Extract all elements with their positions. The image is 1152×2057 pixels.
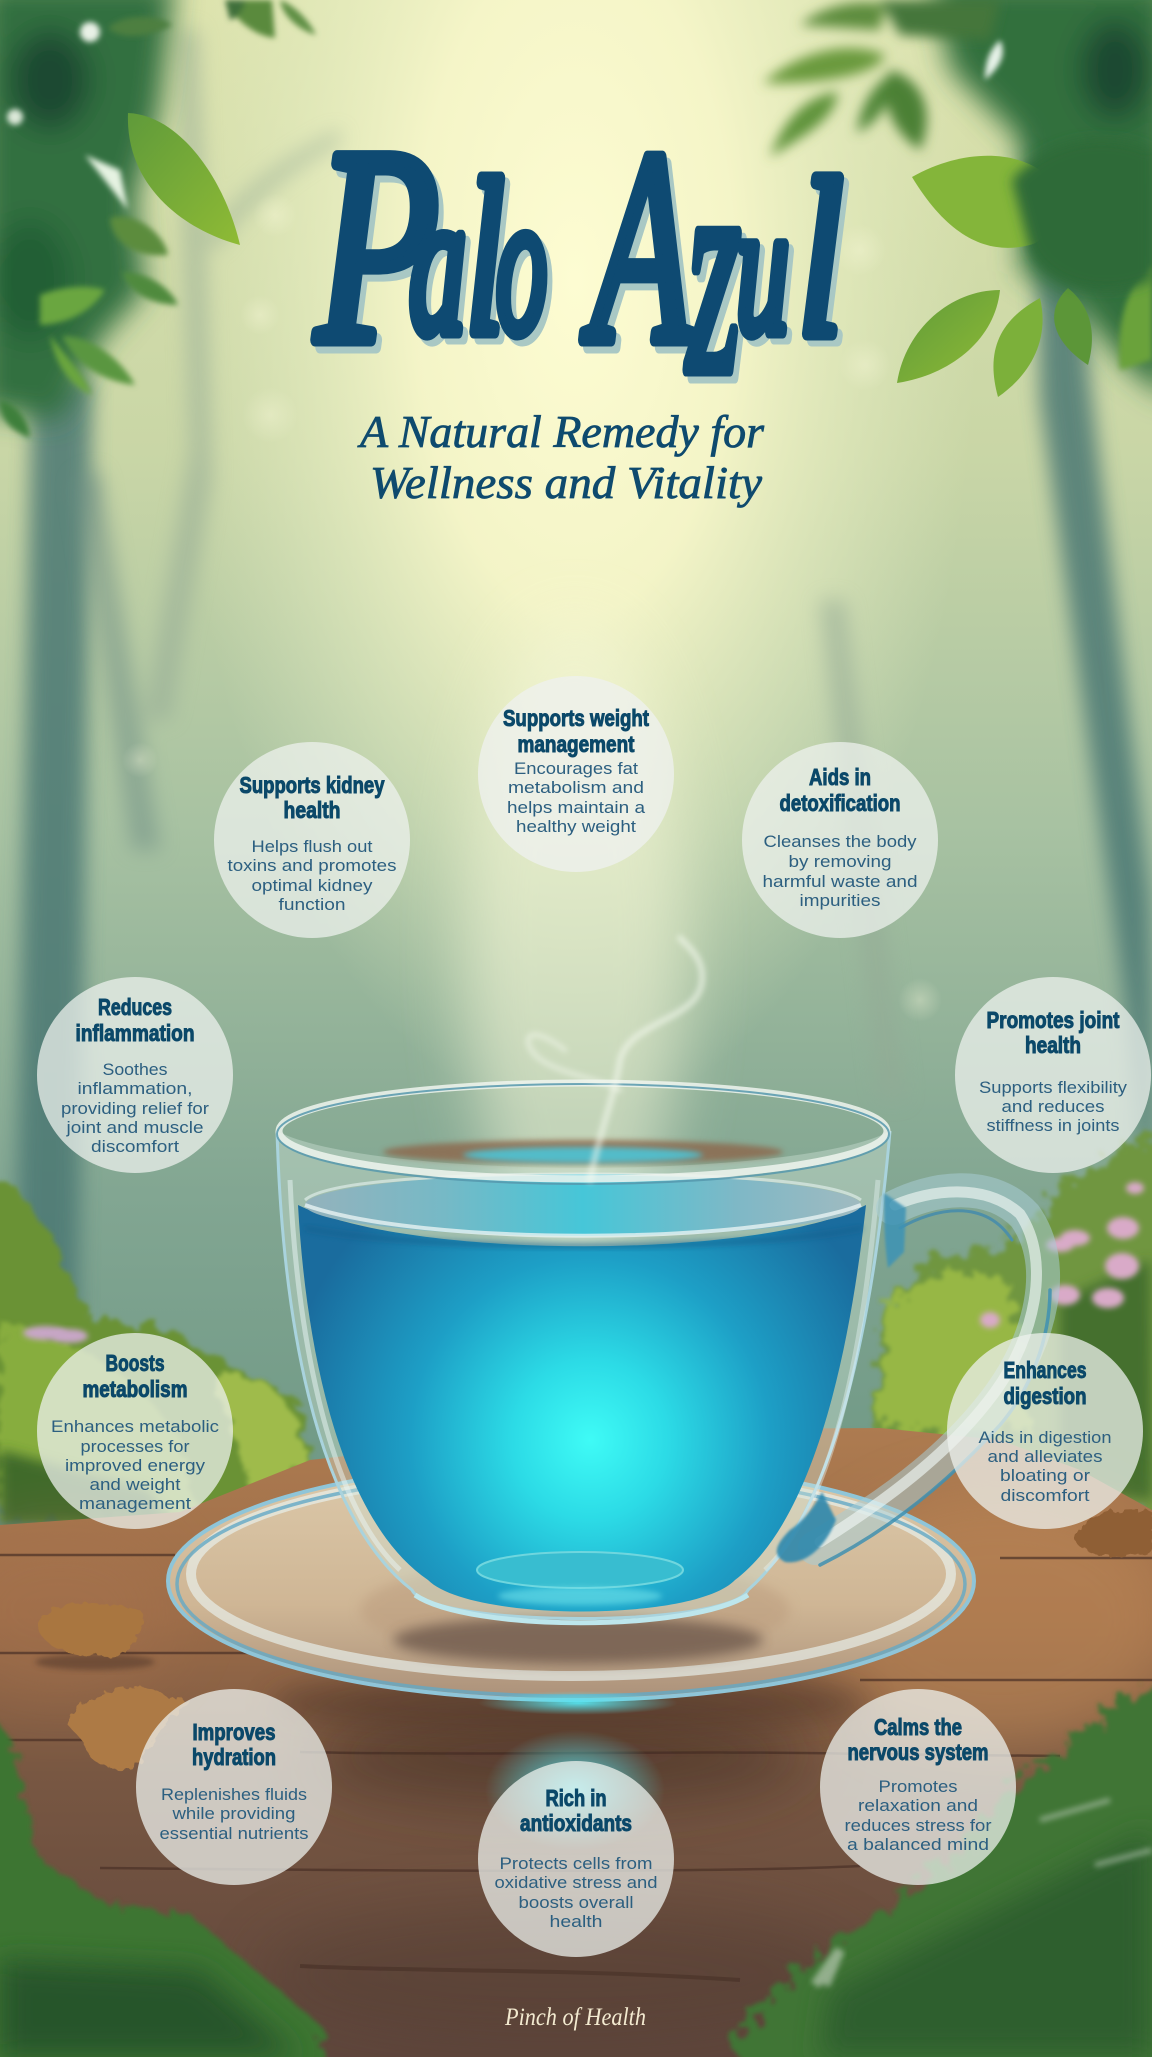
benefit: enhances digestion: digestion	[1004, 1383, 1086, 1409]
benefit: promotes joint health: and reduces	[1002, 1098, 1104, 1116]
cup base	[477, 1552, 683, 1588]
big left leaf	[128, 113, 240, 245]
benefit: aids in detoxification	[742, 742, 938, 938]
benefit: supports kidney health	[214, 742, 410, 938]
left foliage	[0, 0, 316, 438]
benefit: boosts metabolism: and weight	[90, 1476, 181, 1494]
benefit: calms the nervous system: nervous system	[848, 1739, 988, 1765]
benefit: supports kidney health: function	[278, 896, 346, 914]
title shadow: u	[741, 170, 794, 380]
benefit: supports weight management: metabolism and	[508, 779, 644, 797]
title main text: a	[409, 149, 466, 376]
benefit: aids in detoxification: impurities	[800, 892, 880, 910]
title main text: l	[798, 134, 843, 383]
benefit: rich in antioxidants: oxidative stress and	[494, 1874, 658, 1892]
benefit: enhances digestion: and alleviates	[988, 1448, 1102, 1466]
benefit: reduces inflammation: Soothes	[102, 1061, 168, 1079]
benefit: reduces inflammation: joint and muscle	[65, 1119, 203, 1137]
root chips on table	[35, 1509, 1152, 1769]
benefit: supports kidney health: Helps flush out	[252, 838, 373, 856]
benefit: boosts metabolism: Enhances metabolic	[51, 1418, 219, 1436]
benefit: supports weight management: Supports weight	[503, 705, 649, 731]
steam	[528, 938, 702, 1180]
benefit: reduces inflammation: inflammation,	[78, 1080, 192, 1098]
title main text: P	[314, 91, 439, 401]
benefit: boosts metabolism: metabolism	[82, 1376, 188, 1402]
wooden table	[0, 1428, 1152, 2057]
benefit: promotes joint health: health	[1025, 1032, 1081, 1058]
bokeh spots	[122, 193, 942, 1022]
benefit: calms the nervous system: Calms the	[874, 1714, 962, 1740]
title main text: A	[582, 94, 694, 401]
subtitle	[357, 406, 765, 508]
benefit: enhances digestion: Enhances	[1004, 1357, 1086, 1383]
benefit: supports kidney health: toxins and promotes	[228, 857, 396, 875]
benefit: rich in antioxidants: antioxidants	[520, 1810, 632, 1836]
right mid bush with flowers	[875, 1125, 1152, 1510]
footer brand: Pinch of Health	[504, 2004, 646, 2031]
benefit: reduces inflammation: discomfort	[91, 1138, 179, 1156]
benefit: supports weight management: helps maintain a	[507, 799, 646, 817]
title shadow: z	[690, 110, 746, 443]
benefit: improves hydration: hydration	[192, 1744, 276, 1770]
title main text: o	[496, 151, 547, 378]
benefit: reduces inflammation	[37, 977, 233, 1173]
back interior	[383, 1140, 783, 1164]
benefit: rich in antioxidants: Rich in	[546, 1785, 606, 1811]
benefit: boosts metabolism: improved energy	[65, 1457, 206, 1475]
benefit: supports kidney health: health	[284, 797, 340, 823]
benefit: calms the nervous system: reduces stress for	[844, 1817, 992, 1835]
title main text: u	[736, 164, 789, 374]
title shadow: P	[319, 98, 444, 408]
benefit: promotes joint health: Supports flexibility	[979, 1079, 1128, 1097]
cup rim	[279, 1083, 887, 1179]
subtitle: A Natural Remedy for	[357, 406, 765, 457]
title shadow: o	[501, 157, 552, 384]
benefit: aids in detoxification: harmful waste and	[762, 873, 918, 891]
benefit: boosts metabolism: Boosts	[106, 1350, 164, 1376]
left mid bush	[0, 1170, 312, 1525]
benefit: rich in antioxidants: boosts overall	[518, 1894, 634, 1912]
benefit: supports weight management: healthy weight	[516, 818, 636, 836]
benefit: supports kidney health: optimal kidney	[252, 877, 373, 895]
benefit: calms the nervous system: Promotes	[878, 1778, 958, 1796]
benefit: enhances digestion: discomfort	[1000, 1487, 1090, 1505]
benefit: calms the nervous system	[820, 1689, 1016, 1885]
right leaves	[912, 156, 1051, 248]
cup side highlight	[290, 1180, 400, 1570]
benefit: reduces inflammation: providing relief for	[61, 1100, 210, 1118]
cup handle	[815, 1190, 1050, 1565]
title main text	[314, 91, 843, 436]
handle joints	[884, 1193, 906, 1268]
title shadow: a	[414, 155, 471, 382]
subtitle: Wellness and Vitality	[370, 457, 763, 508]
benefit: aids in detoxification: Cleanses the body	[764, 833, 917, 851]
benefit: reduces inflammation: inflammation	[76, 1020, 194, 1046]
bottom right shrub	[735, 1680, 1152, 2057]
benefit: enhances digestion: Aids in digestion	[978, 1429, 1112, 1447]
title shadow: l	[803, 140, 848, 389]
title main text: z	[685, 103, 741, 436]
cup glass body	[277, 1131, 890, 1618]
title shadow	[319, 98, 848, 443]
blue liquid	[298, 1205, 866, 1612]
dark leaves over branch	[1012, 139, 1152, 290]
benefit: aids in detoxification: detoxification	[780, 790, 900, 816]
glow above antioxidants	[485, 1730, 665, 1850]
saucer	[168, 1462, 974, 1733]
benefit: improves hydration: while providing	[171, 1805, 296, 1823]
benefit: reduces inflammation: Reduces	[98, 994, 172, 1020]
title shadow: A	[587, 101, 699, 408]
title shadow: l	[471, 140, 509, 386]
glass cup	[277, 938, 1050, 1623]
benefit: supports kidney health: Supports kidney	[240, 772, 385, 798]
benefit: supports weight management	[478, 676, 674, 872]
benefit: improves hydration: Improves	[192, 1719, 276, 1745]
benefit: boosts metabolism: management	[79, 1495, 191, 1513]
title: Palo Azul	[314, 91, 848, 443]
benefit: aids in detoxification: by removing	[788, 853, 892, 871]
benefit: calms the nervous system: a balanced mind	[847, 1836, 989, 1854]
benefit: rich in antioxidants: Protects cells from	[500, 1855, 652, 1873]
benefit: enhances digestion	[947, 1333, 1143, 1529]
benefit: enhances digestion: bloating or	[1000, 1467, 1091, 1485]
benefit: calms the nervous system: relaxation and	[858, 1797, 978, 1815]
benefit: supports weight management: management	[518, 731, 635, 757]
title main text: l	[466, 134, 504, 380]
right foliage	[763, 0, 1152, 400]
benefit: promotes joint health	[955, 977, 1151, 1173]
benefit: rich in antioxidants: health	[550, 1913, 602, 1931]
benefit: improves hydration: Replenishes fluids	[161, 1786, 307, 1804]
benefit: aids in detoxification: Aids in	[809, 764, 871, 790]
bottom left shrub	[0, 1700, 325, 2057]
benefit: boosts metabolism	[37, 1333, 233, 1529]
benefit: supports weight management: Encourages fat	[514, 760, 638, 778]
benefit: improves hydration: essential nutrients	[160, 1825, 308, 1843]
benefit: promotes joint health: stiffness in joints	[986, 1117, 1120, 1135]
benefit: improves hydration	[136, 1689, 332, 1885]
benefit: boosts metabolism: processes for	[80, 1438, 190, 1456]
liquid surface	[305, 1174, 861, 1236]
benefit: rich in antioxidants	[478, 1761, 674, 1957]
benefit: promotes joint health: Promotes joint	[986, 1007, 1120, 1033]
table plank lines	[0, 1555, 1152, 1980]
